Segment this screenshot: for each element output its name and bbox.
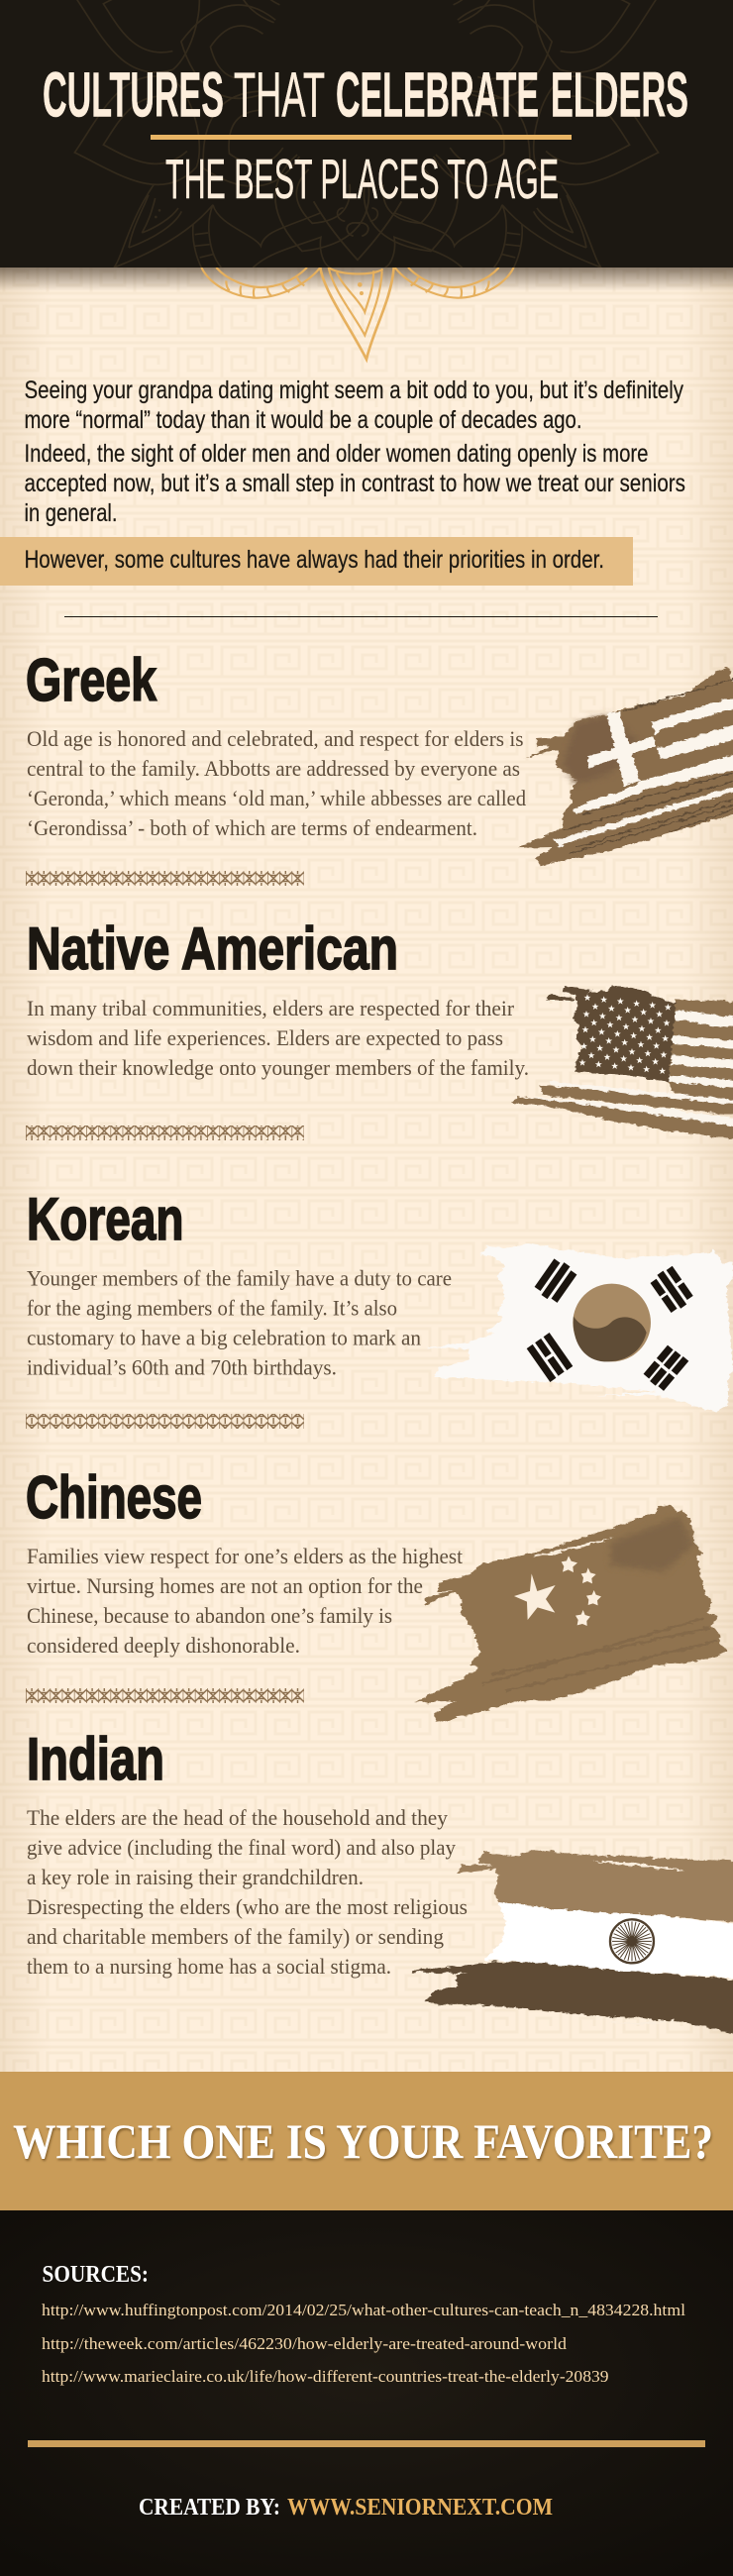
- sources heading: SOURCES:: [42, 2262, 149, 2288]
- source links: [42, 2301, 685, 2386]
- text: Native American: In many tribal communities, elders are respected for their: [27, 996, 515, 1020]
- text: Korean: individual’s 60th and 70th birthdays.: [27, 1355, 337, 1379]
- text: Native American: [27, 996, 529, 1080]
- text: Korean: customary to have a big celebration to mark an: [27, 1326, 421, 1349]
- icon: Greek flag: [518, 668, 733, 866]
- text: Indian: [27, 1805, 468, 1979]
- highlighted callout: [0, 537, 633, 586]
- header panel: [0, 0, 733, 360]
- text: Indian: The elders are the head of the household and they: [27, 1805, 448, 1830]
- text: Greek: ‘Geronda,’ which means ‘old man,’ while abbesses are called: [27, 786, 526, 810]
- title: CELEBRATE: [336, 59, 539, 131]
- credit line: CREATED BY:: [139, 2495, 280, 2521]
- credit line: WWW.SENIORNEXT.COM: [287, 2495, 553, 2521]
- icon: American flag: [512, 986, 733, 1139]
- text: Chinese: virtue. Nursing homes are not an option for the: [27, 1573, 423, 1598]
- divider: [26, 1688, 304, 1703]
- source links: http://www.marieclaire.co.uk/life/how-different-countries-treat-the-elderly-20839: [42, 2367, 608, 2386]
- icon: Indian flag: [411, 1850, 733, 2034]
- intro text: [24, 376, 685, 527]
- text: Korean: [27, 1266, 452, 1379]
- heading: Native American: Native American: [27, 915, 398, 982]
- call to action banner: [0, 2072, 733, 2210]
- text: Greek: Old age is honored and celebrated, and respect for elders is: [27, 726, 523, 751]
- text: Chinese: [27, 1544, 463, 1658]
- divider: [26, 871, 304, 886]
- gold mandala petals below header: [201, 268, 514, 360]
- title: CULTURES: [43, 59, 224, 131]
- source links: http://theweek.com/articles/462230/how-elderly-are-treated-around-world: [42, 2334, 568, 2353]
- footer panel: [0, 2210, 733, 2576]
- section: Chinese: [26, 1464, 728, 1723]
- text: Indian: a key role in raising their grandchildren.: [27, 1865, 364, 1889]
- title rule: [151, 135, 572, 140]
- divider: [26, 1414, 304, 1429]
- credit line: [139, 2495, 553, 2521]
- heading: Chinese: Chinese: [26, 1464, 202, 1531]
- text: Korean: Younger members of the family have a duty to care: [27, 1266, 452, 1290]
- text: Native American: wisdom and life experiences. Elders are expected to pass: [27, 1025, 503, 1050]
- text: Indian: Disrespecting the elders (who are the most religious: [27, 1894, 468, 1919]
- icon: Korean flag: [426, 1243, 733, 1412]
- section: Native American: [26, 915, 733, 1140]
- title: THAT: [234, 59, 325, 131]
- heading: Indian: Indian: [27, 1726, 164, 1792]
- heading: Greek: Greek: [26, 647, 157, 713]
- section: Korean: [26, 1186, 733, 1429]
- text: Korean: for the aging members of the family. It’s also: [27, 1296, 397, 1320]
- text: Chinese: Chinese, because to abandon one’s family is: [27, 1603, 392, 1628]
- footer bar: [28, 2440, 705, 2447]
- text: Chinese: Families view respect for one’s elders as the highest: [27, 1544, 463, 1568]
- text: Chinese: considered deeply dishonorable.: [27, 1633, 300, 1658]
- source links: http://www.huffingtonpost.com/2014/02/25/what-other-cultures-can-teach_n_4834228.html: [42, 2301, 685, 2319]
- header shadow: [0, 268, 733, 291]
- text: Native American: down their knowledge onto younger members of the family.: [27, 1055, 529, 1080]
- text: Indian: give advice (including the final word) and also play: [27, 1835, 456, 1860]
- section: Indian: [27, 1726, 733, 2034]
- highlighted callout: However, some cultures have always had their priorities in order.: [24, 546, 604, 574]
- heading: Korean: Korean: [27, 1186, 184, 1252]
- title: [43, 59, 688, 131]
- text: Indian: them to a nursing home has a social stigma.: [27, 1954, 391, 1979]
- divider: [26, 1126, 304, 1140]
- text: Greek: [27, 726, 526, 840]
- intro text: in general.: [24, 499, 117, 527]
- section: Greek: [26, 647, 733, 886]
- text: Indian: and charitable members of the family) or sending: [27, 1924, 444, 1949]
- intro text: more “normal” today than it would be a couple of decades ago.: [24, 406, 582, 434]
- text: Greek: ‘Gerondissa’ - both of which are terms of endearment.: [27, 815, 477, 840]
- text: Greek: central to the family. Abbotts are addressed by everyone as: [27, 756, 520, 781]
- icon: Chinese flag: [414, 1505, 728, 1723]
- dark mandala ornament: [60, 0, 673, 268]
- ashoka chakra: [610, 1919, 654, 1963]
